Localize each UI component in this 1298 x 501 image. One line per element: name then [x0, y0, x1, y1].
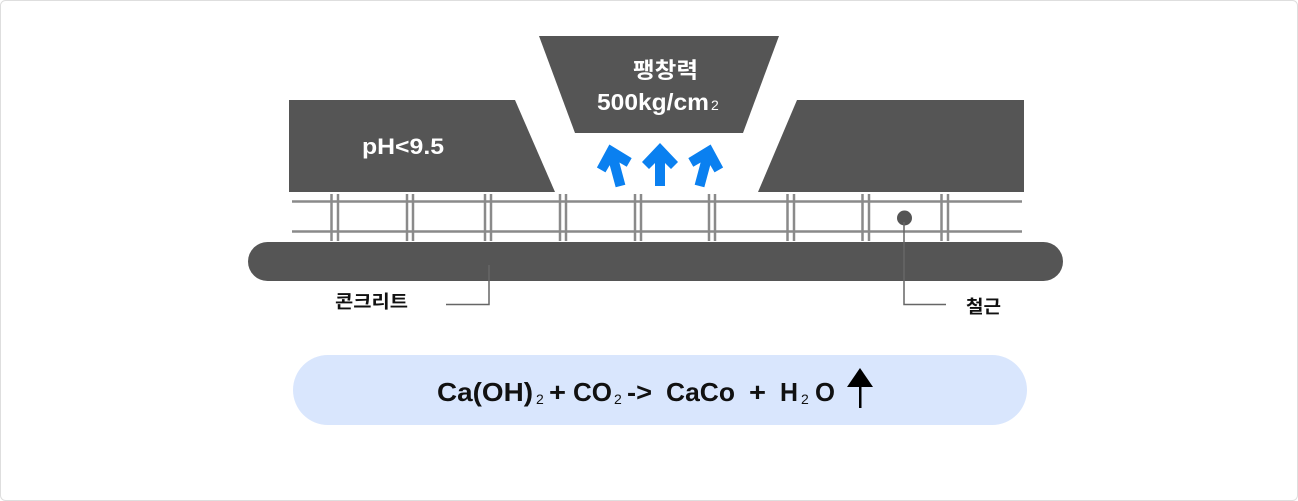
chemical formula: CaCo — [666, 377, 735, 407]
label: expansion pressure: 2 — [711, 97, 719, 113]
chemical formula: CO — [573, 377, 612, 407]
label: concrete: 콘크리트 — [335, 292, 408, 312]
leader line: rebar — [904, 222, 946, 304]
chemical formula — [437, 377, 835, 407]
label: expansion pressure: 500kg/cm — [597, 89, 709, 115]
left concrete block — [289, 100, 555, 192]
icon: black up arrow — [847, 368, 873, 408]
right concrete block — [758, 100, 1024, 192]
rebar marker dot — [897, 210, 912, 226]
label: pH: pH<9.5 — [362, 134, 444, 159]
leader line: concrete — [446, 265, 489, 304]
icon: three blue arrows — [592, 140, 728, 191]
chemical formula: + — [549, 377, 566, 407]
chemical formula: 2 — [536, 391, 544, 407]
chemical formula: O — [815, 377, 835, 407]
chemical formula pill — [293, 355, 1027, 425]
chemical formula: 2 — [614, 391, 622, 407]
chemical formula: H — [780, 377, 798, 407]
chemical formula: + — [749, 377, 766, 407]
chemical formula: -> — [627, 377, 652, 407]
label: expansion pressure: 팽창력 — [633, 58, 698, 83]
chemical formula: Ca(OH) — [437, 377, 533, 407]
chemical formula: 2 — [801, 391, 809, 407]
label: rebar: 철근 — [966, 297, 1001, 317]
rebar grid — [292, 194, 1022, 241]
concrete slab — [248, 242, 1063, 281]
top expansion wedge — [539, 36, 779, 133]
label: expansion pressure — [597, 58, 719, 115]
